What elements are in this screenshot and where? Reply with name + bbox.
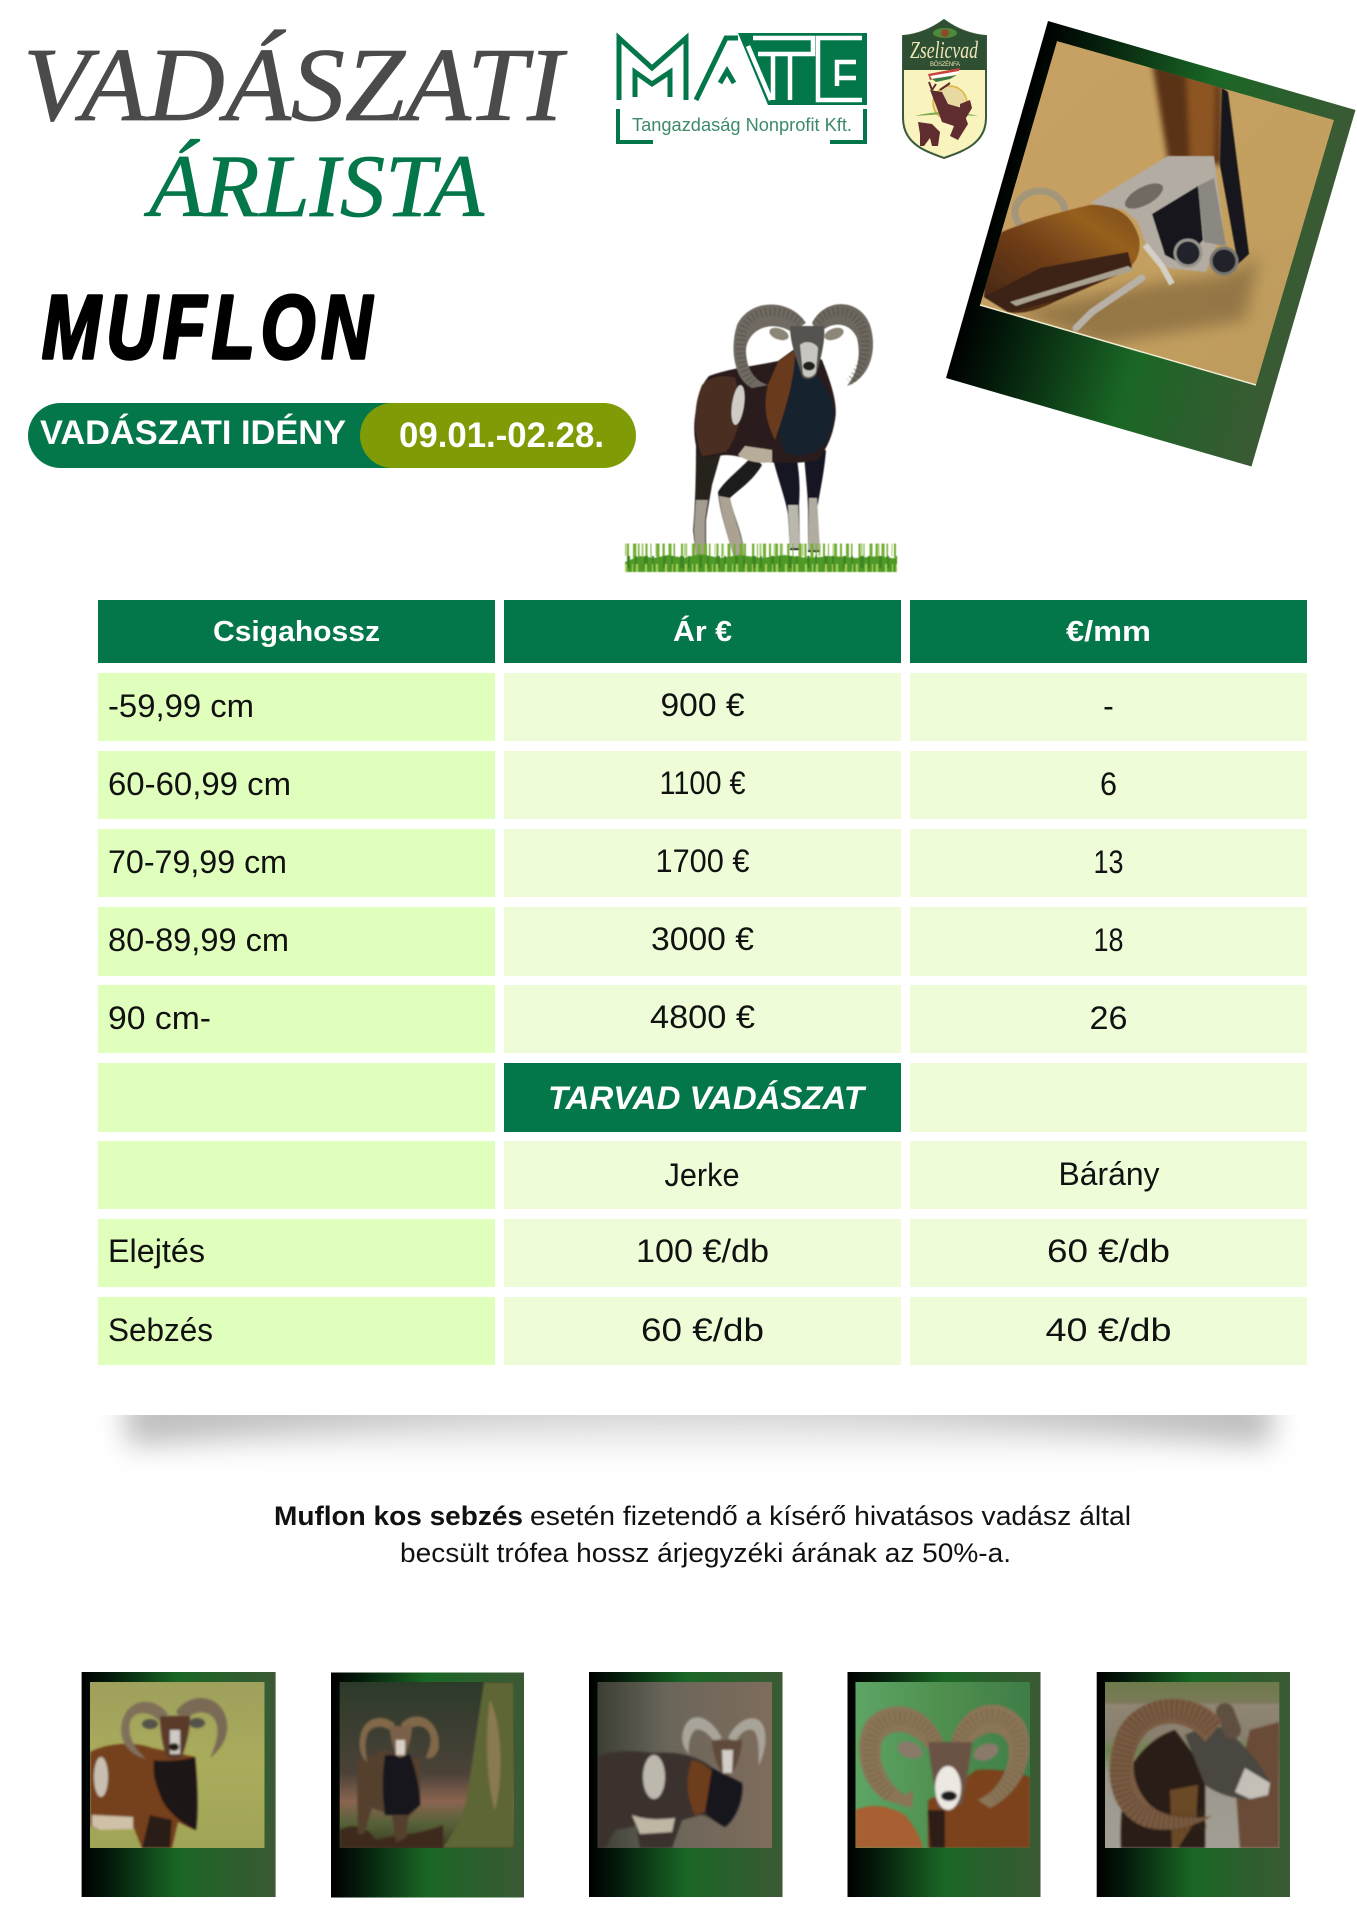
row: 70-79,99 cm: 70-79,99 cm <box>108 844 287 880</box>
heading: MUFLON: MUFLON <box>42 278 373 378</box>
logo: Zselicvad Bőszénfa shield: BŐSZÉNFA <box>930 61 960 68</box>
note text: Muflon kos sebzés <box>274 1501 523 1531</box>
title: ÁRLISTA: ÁRLISTA <box>144 138 485 236</box>
row: TARVAD VADÁSZAT sub-header: TARVAD VADÁSZAT <box>548 1080 867 1116</box>
photo card 5: mouflon profile with curled horn <box>1097 1672 1290 1897</box>
barrel <box>1220 88 1249 264</box>
table header row: Ár € <box>673 614 732 648</box>
row: TARVAD VADÁSZAT sub-header <box>98 1063 1307 1132</box>
photo: shotgun on tan background <box>980 41 1334 385</box>
logo: Zselicvad Bőszénfa shield: Zselicvad <box>910 38 979 64</box>
row: Jerke / Bárány <box>98 1141 1307 1209</box>
table header row: Csigahossz <box>213 616 380 648</box>
pill dates: 09.01.-02.28. <box>399 416 604 455</box>
photo card 4: mouflon head with large horns <box>848 1672 1040 1897</box>
row: Sebzés: Sebzés <box>108 1312 213 1348</box>
photo card 2: mouflon by tree in forest <box>331 1672 524 1898</box>
breech <box>1152 186 1203 264</box>
row: 60-60,99 cm <box>98 751 1307 819</box>
row: Jerke / Bárány: Jerke <box>664 1157 740 1193</box>
row: 80-89,99 cm: 3000 € <box>651 921 754 957</box>
row: -59,99 cm <box>98 673 1307 741</box>
row: Sebzés <box>98 1297 1307 1365</box>
hunting season pill <box>28 403 636 468</box>
photo card 3: mouflon with white saddle patch <box>589 1672 782 1897</box>
row: Jerke / Bárány: Bárány <box>1058 1156 1160 1192</box>
row: -59,99 cm: 900 € <box>660 687 745 723</box>
row: 60-60,99 cm: 60-60,99 cm <box>108 766 291 802</box>
row: Elejtés: 100 €/db <box>636 1233 769 1269</box>
title: VADÁSZATI: VADÁSZATI <box>23 26 568 143</box>
price table <box>98 600 1307 1365</box>
ears <box>768 325 790 343</box>
pill label: VADÁSZATI IDÉNY <box>40 414 346 452</box>
row: Elejtés <box>98 1219 1307 1287</box>
receiver <box>1090 156 1223 272</box>
trigger guard <box>1015 191 1065 233</box>
photo card 1: mouflon on meadow <box>82 1672 276 1897</box>
row: 80-89,99 cm: 18 <box>1094 922 1124 958</box>
head <box>790 326 824 379</box>
row: Sebzés: 60 €/db <box>641 1312 764 1348</box>
horns <box>733 304 806 388</box>
note text <box>274 1501 1131 1568</box>
note text: becsült trófea hossz árjegyzéki árának az 50%-a. <box>400 1538 1011 1568</box>
row: -59,99 cm: - <box>1103 688 1114 724</box>
rear legs <box>693 445 722 558</box>
row: 70-79,99 cm: 13 <box>1094 844 1124 880</box>
row: 90 cm-: 90 cm- <box>108 1000 211 1036</box>
row: 90 cm-: 26 <box>1090 1000 1128 1036</box>
body <box>694 345 836 463</box>
logo: MATE Tangazdaság <box>618 33 867 142</box>
row: 60-60,99 cm: 6 <box>1100 766 1117 802</box>
stock <box>984 205 1140 313</box>
row: 80-89,99 cm <box>98 907 1307 976</box>
row: Sebzés: 40 €/db <box>1046 1312 1172 1348</box>
table header row: €/mm <box>1066 616 1151 648</box>
row: 70-79,99 cm <box>98 829 1307 897</box>
logo: Zselicvad Bőszénfa shield <box>903 20 986 158</box>
row: 80-89,99 cm: 80-89,99 cm <box>108 922 289 958</box>
table header row <box>98 600 1307 663</box>
row: 70-79,99 cm: 1700 € <box>656 843 750 879</box>
photo frame: tilted shotgun photo <box>946 21 1356 466</box>
row: -59,99 cm: -59,99 cm <box>108 688 254 724</box>
row: 90 cm- <box>98 985 1307 1053</box>
grass tuft <box>625 545 897 572</box>
logo text: Tangazdaság Nonprofit Kft. <box>632 115 852 135</box>
illustration: standing mouflon on grass <box>625 304 897 572</box>
note text: esetén fizetendő a kísérő hivatásos vadász által <box>530 1501 1131 1531</box>
row: 60-60,99 cm: 1100 € <box>660 765 746 801</box>
curved drop shadow under table <box>110 1415 1288 1460</box>
row: 90 cm-: 4800 € <box>650 999 755 1035</box>
row: Elejtés: Elejtés <box>108 1233 205 1269</box>
lever <box>1076 278 1142 328</box>
row: Elejtés: 60 €/db <box>1047 1233 1170 1269</box>
forend wood <box>1152 62 1222 165</box>
front legs <box>772 455 800 550</box>
